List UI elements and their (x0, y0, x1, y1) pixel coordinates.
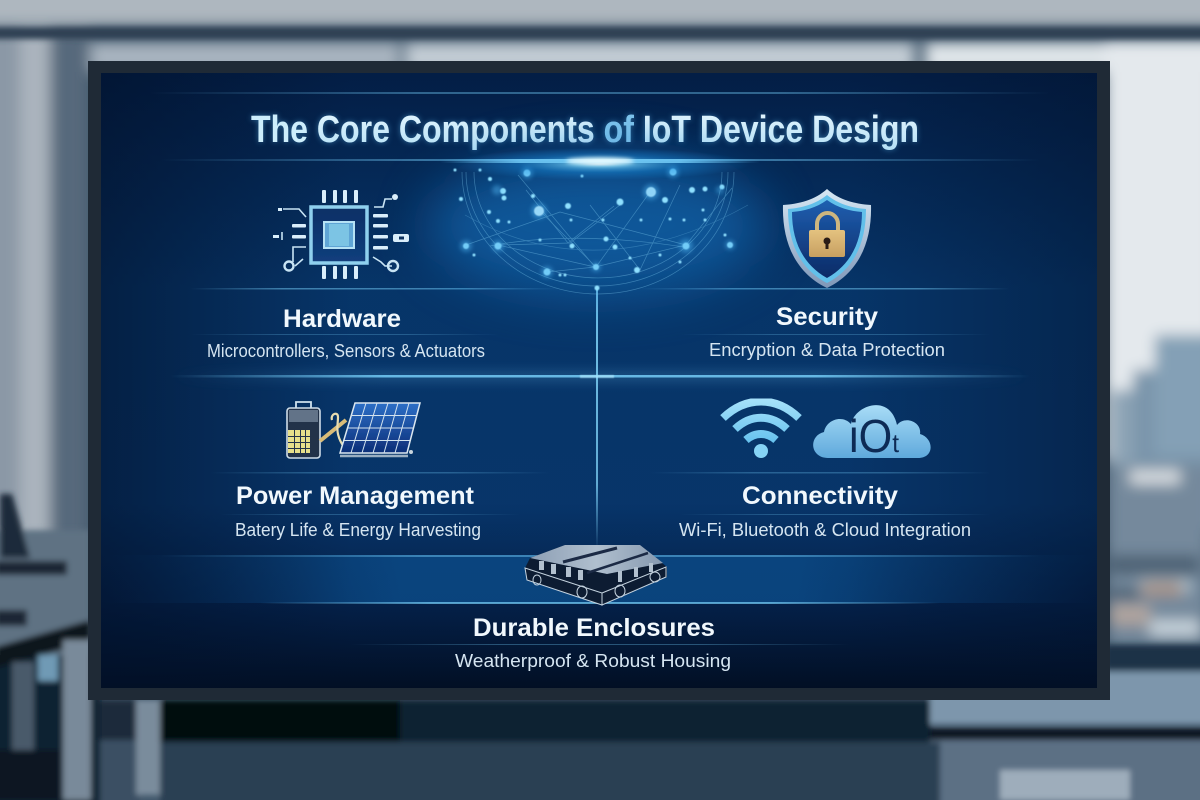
network globe with glow (427, 148, 767, 295)
text: security description: Encryption & Data Protection (709, 340, 945, 360)
heading: Connectivity: Connectivity (742, 482, 898, 510)
icon: wifi signal (723, 402, 799, 458)
icon: security shield with padlock (783, 189, 871, 288)
icon: IoT cloud: iOt (849, 410, 900, 462)
display frame (88, 61, 1110, 700)
text: connectivity description: Wi-Fi, Bluetooth & Cloud Integration (679, 520, 971, 540)
heading: Power Management: Power Management (236, 482, 475, 510)
text: power description: Batery Life & Energy Harvesting (235, 520, 481, 540)
heading: Durable Enclosures: Durable Enclosures (473, 614, 715, 642)
icon: IoT cloud (813, 405, 931, 462)
title: The Core Components of IoT Device Design (251, 109, 919, 151)
display screen (101, 73, 1097, 688)
title: The Core Components of IoT Device Design (251, 109, 919, 151)
heading: Security: Security (776, 303, 878, 331)
icon: microchip (hardware) (273, 190, 409, 279)
icon: battery and solar panel (287, 402, 420, 458)
network nodes (454, 168, 733, 290)
text: enclosures description: Weatherproof & Robust Housing (455, 651, 731, 671)
heading: Hardware: Hardware (283, 305, 401, 333)
divider lines (150, 92, 1050, 645)
icon: durable enclosure (525, 545, 667, 605)
text: hardware description: Microcontrollers, Sensors & Actuators (207, 341, 485, 361)
